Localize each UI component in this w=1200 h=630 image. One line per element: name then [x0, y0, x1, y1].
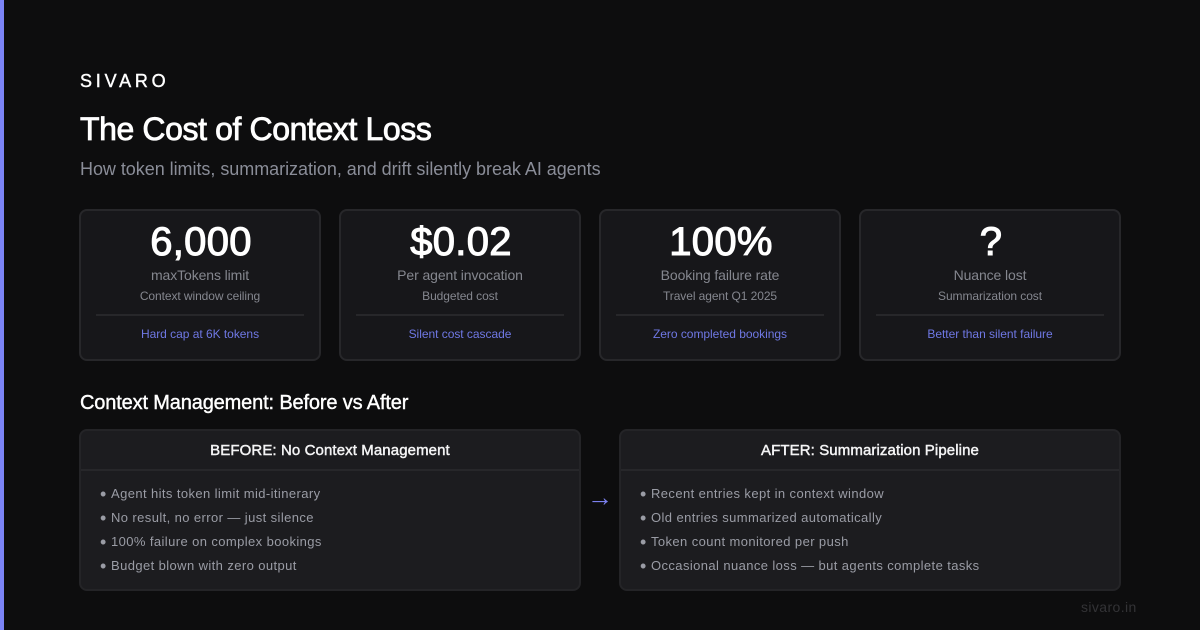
arrow: →: [587, 482, 613, 512]
panel: before: Budget blown with zero output: [111, 558, 297, 573]
stat card: invocation cost: Per agent invocation: [397, 267, 523, 283]
panel: after: Occasional nuance loss — but agents complete tasks: [651, 558, 980, 573]
stat card: failure rate: Travel agent Q1 2025: [663, 289, 777, 303]
stat card: failure rate: 100%: [669, 220, 773, 264]
subtitle: How token limits, summarization, and drift silently break AI agents: [80, 159, 601, 179]
stat card: max tokens: [79, 209, 321, 361]
panel: after: Recent entries kept in context window: [651, 486, 884, 501]
panel: before: •: [100, 484, 106, 504]
panel: after: [619, 429, 1121, 591]
stat card: nuance lost: Nuance lost: [954, 267, 1026, 283]
stat card: invocation cost: [339, 209, 581, 361]
section heading: Context Management: Before vs After: [80, 392, 408, 414]
footer url: sivaro.in: [1081, 599, 1137, 615]
stat card: failure rate: Zero completed bookings: [653, 327, 787, 341]
stat card: nuance lost: ?: [980, 220, 1002, 264]
stat card: invocation cost: Budgeted cost: [422, 289, 498, 303]
panel: after: Token count monitored per push: [651, 534, 849, 549]
stat card: nuance lost: Summarization cost: [938, 289, 1042, 303]
title: The Cost of Context Loss: [80, 111, 431, 147]
panel: before: •: [100, 556, 106, 576]
stat card: invocation cost: Silent cost cascade: [409, 327, 511, 341]
panel: before: •: [100, 532, 106, 552]
panel: after: AFTER: Summarization Pipeline: [761, 442, 979, 459]
stat card: max tokens: 6,000: [150, 220, 252, 264]
stat card: max tokens: Hard cap at 6K tokens: [141, 327, 259, 341]
panel: before: [79, 429, 581, 591]
panel: after: •: [640, 556, 646, 576]
panel: after: •: [640, 508, 646, 528]
panel: after: Old entries summarized automatically: [651, 510, 882, 525]
panel: before: BEFORE: No Context Management: [210, 442, 450, 459]
brand wordmark: SIVARO: [80, 71, 169, 91]
stat card: nuance lost: [859, 209, 1121, 361]
panel: before: No result, no error — just silence: [111, 510, 314, 525]
stat card: failure rate: [599, 209, 841, 361]
panel: after: •: [640, 484, 646, 504]
stat card: failure rate: Booking failure rate: [661, 267, 779, 283]
stat card: nuance lost: Better than silent failure: [927, 327, 1053, 341]
stat card: max tokens: maxTokens limit: [151, 267, 249, 283]
stat card: max tokens: Context window ceiling: [140, 289, 260, 303]
panel: before: 100% failure on complex bookings: [111, 534, 322, 549]
panel: after: •: [640, 532, 646, 552]
stat card: invocation cost: $0.02: [410, 220, 512, 264]
left accent bar: [0, 0, 4, 630]
panel: before: Agent hits token limit mid-itinerary: [111, 486, 320, 501]
panel: before: •: [100, 508, 106, 528]
